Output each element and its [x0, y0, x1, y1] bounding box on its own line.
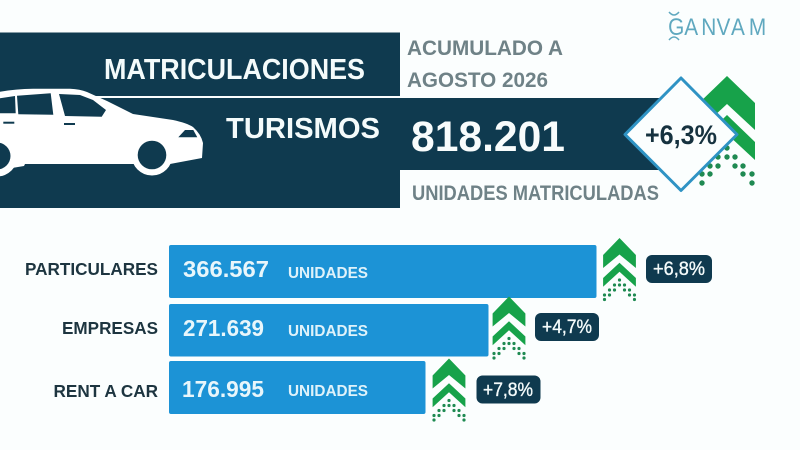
label: rent a car: RENT A CAR — [54, 381, 158, 401]
row: particulares — [25, 238, 712, 301]
badge: rent a car growth: +7,8% — [483, 380, 533, 401]
unit: rent a car: UNIDADES — [288, 383, 368, 400]
icon: arrow empresas — [492, 296, 526, 360]
label: empresas: EMPRESAS — [62, 318, 158, 338]
text: accumulated period: AGOSTO 2026 — [407, 69, 548, 92]
row: rent a car — [54, 358, 540, 422]
badge: empresas growth — [535, 313, 599, 341]
bar: particulares — [169, 245, 596, 298]
bar: rent a car — [169, 361, 426, 414]
panel: header band — [0, 32, 670, 208]
callout: total growth diamond: +6,3% — [645, 120, 717, 150]
subtitle: turismos: TURISMOS — [226, 113, 380, 145]
text: accumulated period — [407, 37, 563, 92]
icon: arrow rent a car — [432, 358, 466, 422]
text: units registered: UNIDADES MATRICULADAS — [412, 182, 659, 205]
total number: 818.201 — [411, 113, 565, 161]
badge: empresas growth: +4,7% — [542, 317, 592, 338]
icon: arrow particulares — [603, 238, 636, 301]
value: particulares: 366.567 — [183, 256, 269, 282]
icon: white car — [0, 89, 203, 176]
icon: large green growth arrow — [699, 76, 755, 186]
row: empresas — [62, 296, 599, 360]
title: matriculaciones: MATRICULACIONES — [104, 54, 365, 86]
label: particulares: PARTICULARES — [25, 259, 158, 279]
logo: GANVAM: GANVAM — [668, 12, 766, 40]
value: empresas: 271.639 — [183, 315, 264, 341]
text: accumulated period: ACUMULADO A — [407, 37, 563, 60]
unit: empresas: UNIDADES — [288, 323, 368, 340]
unit: particulares: UNIDADES — [288, 265, 368, 282]
badge: particulares growth: +6,8% — [653, 259, 705, 280]
value: rent a car: 176.995 — [182, 376, 264, 402]
bar: empresas — [169, 304, 488, 356]
callout: total growth diamond — [625, 78, 737, 190]
badge: particulares growth — [646, 255, 712, 283]
badge: rent a car growth — [476, 376, 540, 404]
